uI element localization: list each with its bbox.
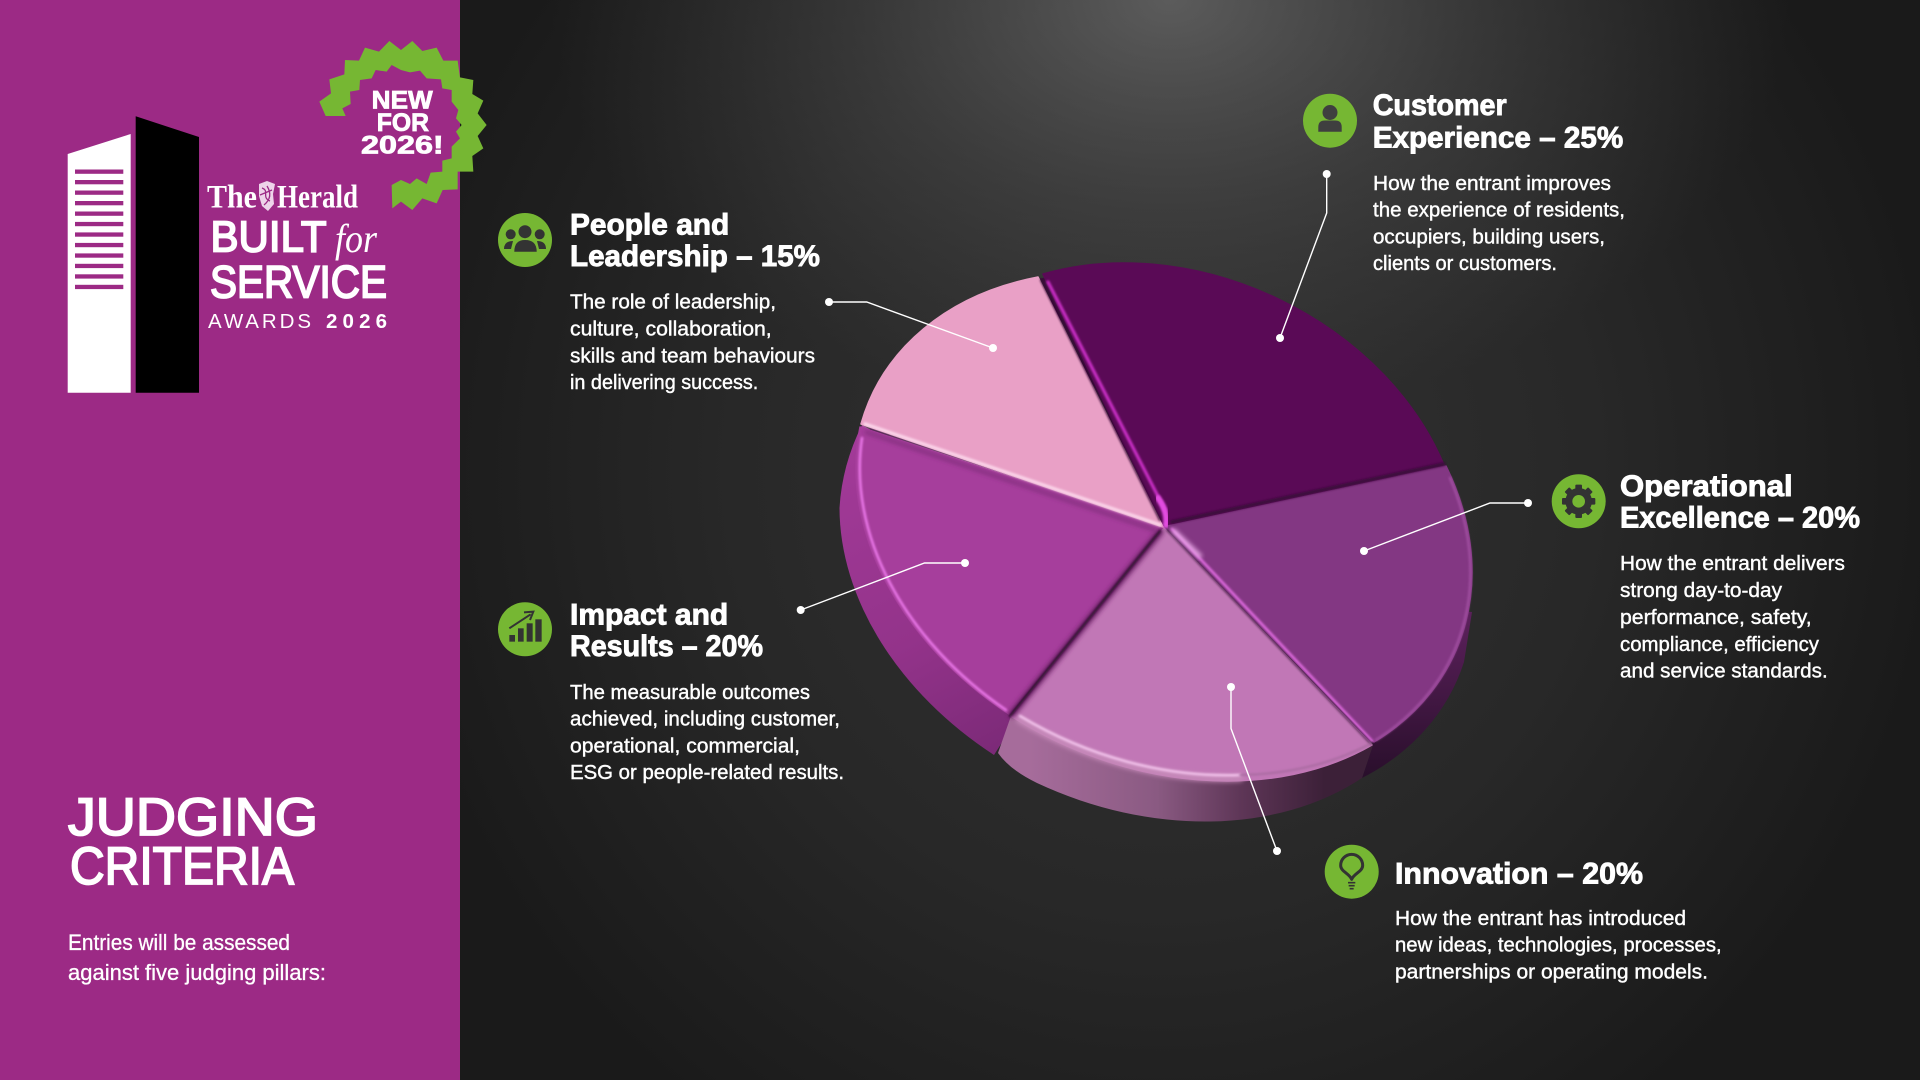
- slice: operational excellence 20%: [1163, 466, 1472, 742]
- logo: The Herald Built for Service Awards 2026: for: [335, 216, 377, 261]
- pie base shadow between slices: [782, 177, 1548, 873]
- callout: operational excellence: [1552, 470, 1860, 682]
- description: [1395, 907, 1722, 984]
- description: performance, safety,: [1620, 606, 1812, 629]
- heading: People and: [570, 208, 729, 241]
- heading: Experience – 25%: [1373, 122, 1623, 155]
- intro text: [68, 930, 326, 985]
- heading: [570, 208, 820, 273]
- icon: gear: [1552, 474, 1606, 528]
- icon: building logo: [68, 116, 199, 393]
- heading: [1373, 89, 1623, 155]
- logo: The Herald Built for Service Awards 2026: BUILT: [210, 213, 326, 262]
- slice: customer experience 25%: [1043, 263, 1444, 527]
- logo: The Herald Built for Service Awards 2026: Herald: [277, 180, 358, 216]
- description: [570, 290, 815, 394]
- description: operational, commercial,: [570, 734, 800, 757]
- leader line: people and leadership: [825, 298, 997, 352]
- slice: innovation 20%: [1011, 527, 1372, 781]
- icon: people group: [498, 213, 552, 267]
- heading: Operational: [1620, 470, 1793, 503]
- heading: Impact and: [570, 598, 728, 631]
- pie side: left rim: [840, 425, 1015, 755]
- description: culture, collaboration,: [570, 318, 772, 341]
- icon: person: [1303, 94, 1357, 148]
- description: [1373, 172, 1625, 275]
- badge: new for 2026: [319, 41, 487, 210]
- badge: new for 2026: NEW: [372, 86, 433, 114]
- slice: people and leadership 15%: [861, 277, 1163, 527]
- description: [1620, 552, 1845, 682]
- description: How the entrant improves: [1373, 172, 1611, 195]
- description: the experience of residents,: [1373, 199, 1625, 222]
- badge: new for 2026: FOR: [377, 109, 429, 137]
- description: new ideas, technologies, processes,: [1395, 934, 1722, 957]
- pie side: front rim: [998, 600, 1373, 822]
- heading: [1620, 470, 1860, 535]
- icon: lightbulb: [1325, 845, 1379, 899]
- logo: The Herald Built for Service Awards 2026: AWARDS: [208, 310, 311, 333]
- logo: The Herald Built for Service Awards 2026: The: [207, 180, 257, 216]
- callout: people and leadership: [498, 208, 820, 394]
- description: in delivering success.: [570, 371, 758, 394]
- description: [570, 681, 844, 784]
- slice: impact and results 20%: [856, 427, 1163, 714]
- heading: Results – 20%: [570, 630, 763, 663]
- leader line: operational excellence: [1360, 499, 1532, 555]
- heading: [570, 598, 763, 663]
- description: skills and team behaviours: [570, 344, 815, 367]
- logo: The Herald Built for Service Awards 2026: 2026: [326, 310, 387, 333]
- heading: Leadership – 15%: [570, 240, 820, 273]
- intro text: against five judging pillars:: [68, 960, 326, 985]
- heading: Customer: [1373, 89, 1507, 122]
- title: judging criteria: CRITERIA: [70, 837, 295, 896]
- leader line: customer experience: [1276, 170, 1331, 342]
- description: occupiers, building users,: [1373, 225, 1605, 248]
- icon: rising bar chart: [498, 602, 552, 656]
- description: ESG or people-related results.: [570, 761, 844, 784]
- panel: left sidebar: [0, 0, 487, 1080]
- logo: The Herald Built for Service Awards 2026: SERVICE: [210, 256, 387, 307]
- description: How the entrant delivers: [1620, 552, 1845, 575]
- pie side: right dark rim: [1300, 600, 1472, 778]
- leader line: innovation: [1227, 683, 1281, 855]
- logo: The Herald Built for Service Awards 2026: [207, 180, 387, 333]
- badge: new for 2026: 2026!: [361, 131, 444, 159]
- description: How the entrant has introduced: [1395, 907, 1686, 930]
- heading: Innovation – 20%: [1395, 857, 1643, 890]
- description: partnerships or operating models.: [1395, 960, 1708, 984]
- description: and service standards.: [1620, 660, 1828, 682]
- callout: customer experience: [1303, 89, 1625, 275]
- heading: Excellence – 20%: [1620, 502, 1860, 535]
- callout: innovation: [1325, 845, 1722, 984]
- description: strong day-to-day: [1620, 579, 1783, 602]
- description: The role of leadership,: [570, 290, 776, 314]
- bevel highlights: [860, 280, 1470, 778]
- description: achieved, including customer,: [570, 708, 840, 731]
- description: clients or customers.: [1373, 252, 1557, 275]
- chart: 3D pie of judging weights: [782, 177, 1548, 873]
- intro text: Entries will be assessed: [68, 930, 290, 955]
- description: The measurable outcomes: [570, 681, 810, 704]
- title: judging criteria: [68, 788, 318, 896]
- description: compliance, efficiency: [1620, 633, 1820, 656]
- callout: impact and results: [498, 598, 844, 784]
- leader line: impact and results: [797, 559, 969, 614]
- title: judging criteria: JUDGING: [68, 788, 318, 847]
